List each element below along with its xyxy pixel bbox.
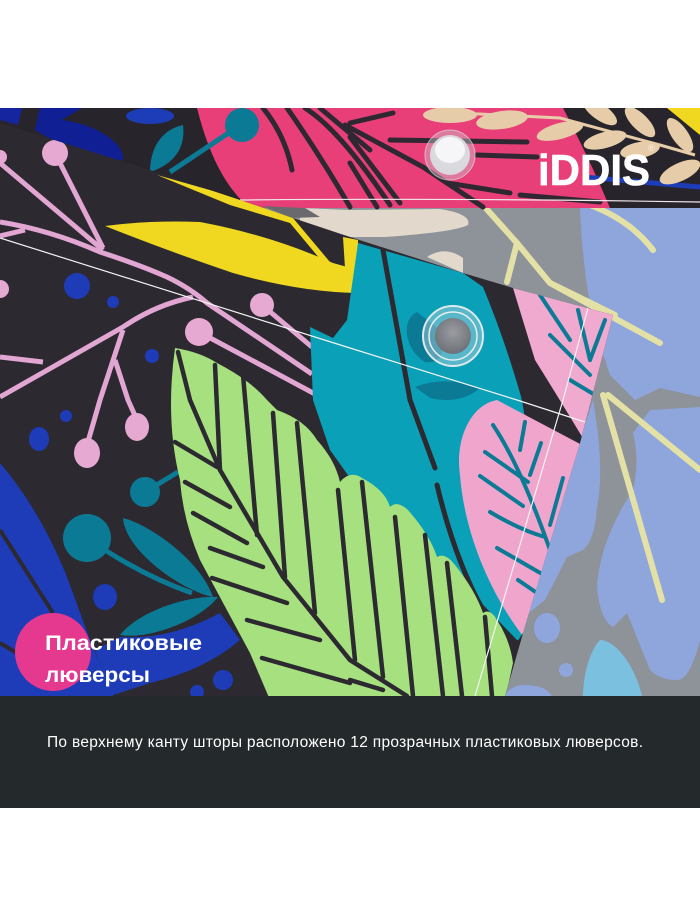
teal leaf — [310, 243, 560, 640]
yellow leaf — [105, 222, 358, 293]
eyelet: clear plastic — [423, 306, 483, 366]
front layer: folded corner — [0, 110, 640, 700]
pink stems and berries — [0, 163, 315, 445]
blue dots — [29, 273, 233, 699]
heading: люверсы — [45, 664, 150, 687]
logo: iDDIS — [538, 146, 650, 195]
pink leaf veins — [263, 108, 600, 207]
logo: ® — [648, 143, 655, 153]
pink leaf — [459, 400, 582, 636]
folded edge highlight — [300, 208, 468, 237]
back layer: gray fabric with pale pattern — [264, 208, 700, 696]
photo: curtain fabric — [0, 94, 700, 700]
green leaf — [171, 348, 513, 700]
pink leaf veins — [480, 295, 605, 593]
green leaf veins — [175, 352, 492, 696]
dark tip — [510, 633, 523, 680]
eyelet: top, white backing — [425, 130, 475, 180]
pink flap — [513, 288, 613, 436]
heading: Пластиковые — [45, 632, 202, 655]
dark teal berries — [63, 477, 218, 636]
blue big leaf — [0, 463, 113, 696]
top hem with pink leaf — [0, 108, 700, 210]
badge circle — [15, 613, 91, 691]
footer band — [0, 696, 700, 808]
stitching lines — [0, 238, 588, 696]
beige leaf sprig — [423, 108, 700, 184]
caption text: По верхнему канту шторы расположено 12 прозрачных пластиковых люверсов. — [47, 734, 643, 751]
